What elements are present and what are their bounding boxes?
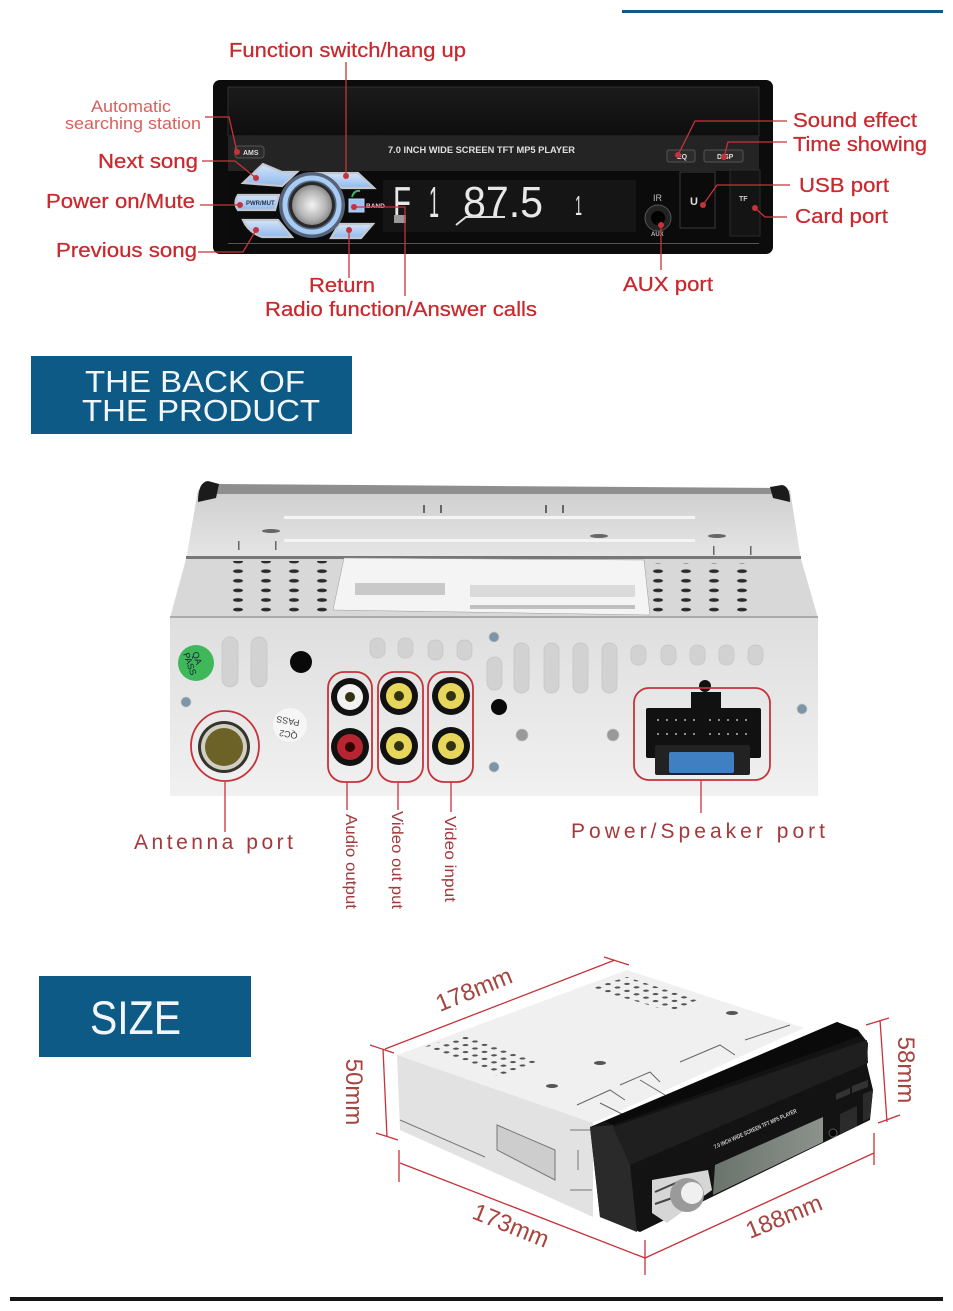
front labels: Function switch/hang up: [229, 40, 466, 62]
display: [383, 178, 636, 232]
display: F: [393, 178, 411, 227]
dimension labels: 178mm: [432, 963, 516, 1018]
QC2 pass sticker: PASS: [276, 714, 300, 728]
USB, card and AUX ports: AUX: [651, 232, 664, 238]
front labels: Next song: [98, 151, 198, 173]
display: 1: [575, 190, 582, 221]
isometric unit: [397, 970, 873, 1232]
front labels: USB port: [799, 175, 889, 197]
heading: size: [39, 976, 251, 1057]
heading: size: SIZE: [90, 991, 181, 1044]
rear labels: Audio output: [342, 814, 359, 910]
USB, card and AUX ports: [645, 170, 760, 238]
callout lines: [198, 62, 790, 296]
rear labels: Antenna port: [134, 831, 293, 854]
blue control buttons: PWR/MUT: [246, 201, 275, 207]
RCA sockets: [328, 672, 473, 782]
dimension lines: [370, 957, 900, 1275]
QC2 pass sticker: [273, 708, 307, 742]
dimension labels: [340, 963, 919, 1254]
front unit body: [213, 80, 773, 254]
front labels: Return: [309, 275, 375, 297]
small buttons: AMS: [243, 150, 259, 157]
front labels: [46, 40, 927, 321]
dimension labels: 58mm: [892, 1037, 919, 1103]
chassis: [170, 481, 818, 796]
panel: size diagram: [340, 957, 919, 1275]
front bezel: 7.0 INCH WIDE SCREEN TFT MP5 PLAYER: [713, 1109, 798, 1151]
front labels: searching station: [65, 114, 201, 133]
blue control buttons: [236, 164, 385, 238]
front labels: Radio function/Answer calls: [265, 299, 537, 321]
rear labels: [134, 811, 825, 910]
small buttons: EQ: [677, 154, 688, 161]
front labels: Previous song: [56, 240, 197, 262]
small buttons: [235, 146, 743, 162]
display: 1: [429, 178, 439, 227]
front bezel: [590, 1022, 873, 1232]
front labels: Card port: [795, 206, 888, 228]
bottom bar: [10, 1297, 943, 1301]
display: 87.5: [463, 178, 543, 227]
front labels: AUX port: [623, 274, 713, 296]
heading: the back of the product: THE BACK OF: [85, 364, 305, 399]
spec sticker: [333, 558, 650, 615]
front labels: Power on/Mute: [46, 191, 195, 213]
rear labels: Video out put: [388, 811, 405, 910]
front labels: Time showing: [793, 134, 927, 156]
QC2 pass sticker: QC2: [278, 728, 298, 741]
heading: the back of the product: [31, 356, 352, 434]
volume knob: [279, 172, 345, 238]
front labels: Automatic: [91, 97, 172, 116]
heading: the back of the product: THE PRODUCT: [82, 393, 320, 428]
USB, card and AUX ports: U: [690, 196, 698, 208]
panel: front of the product: [46, 40, 927, 321]
model caption: 7.0 INCH WIDE SCREEN TFT MP5 PLAYER: [388, 145, 576, 155]
USB, card and AUX ports: TF: [739, 196, 748, 203]
front labels: Sound effect: [793, 110, 917, 132]
QA pass sticker: QA: [190, 650, 204, 666]
power and speaker connector: [634, 680, 770, 780]
vents, holes and screws: [181, 632, 807, 772]
rear labels: Power/Speaker port: [571, 820, 825, 843]
panel: rear of the product: [134, 481, 825, 910]
dimension labels: 50mm: [340, 1059, 367, 1125]
rear callout lines: [225, 780, 701, 832]
dimension labels: 188mm: [742, 1190, 826, 1245]
QA pass sticker: PASS: [181, 651, 199, 677]
small buttons: DISP: [717, 154, 734, 161]
rear labels: Video input: [441, 816, 458, 903]
blue control buttons: BAND: [366, 203, 385, 210]
top accent bar: [622, 10, 943, 13]
USB, card and AUX ports: IR: [653, 193, 663, 203]
antenna port: [191, 711, 259, 781]
dimension labels: 173mm: [469, 1199, 553, 1254]
QA pass sticker: [178, 645, 214, 681]
